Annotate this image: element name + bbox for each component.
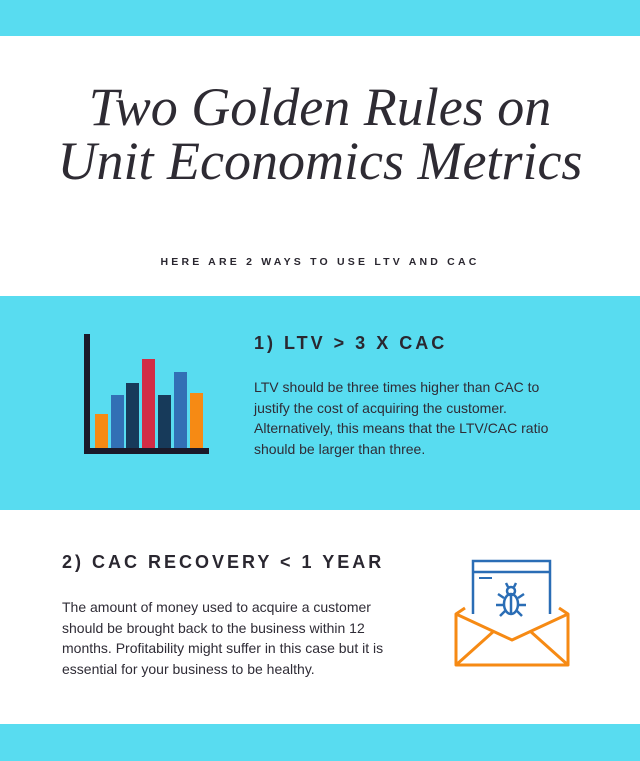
subtitle: HERE ARE 2 WAYS TO USE LTV AND CAC: [160, 256, 480, 268]
icon: bar chart: [84, 334, 209, 454]
text: rule 2: The amount of money used to acquire a customer should be brought back to the business within 12 months. Profitability might suffer in this case but it is essential for your business to be healthy.: [62, 599, 383, 676]
heading: rule 2: 2) CAC RECOVERY < 1 YEAR: [62, 552, 384, 572]
title: Two Golden Rules on: [89, 77, 551, 137]
title: Unit Economics Metrics: [58, 131, 582, 191]
heading: rule 1: 1) LTV > 3 X CAC: [254, 333, 447, 353]
title: [58, 77, 582, 191]
icon: envelope with bug: [454, 560, 570, 666]
text: rule 1: LTV should be three times higher than CAC to justify the cost of acquiring the customer. Alternatively, this means that the LTV/CAC ratio should be larger than three.: [254, 379, 548, 456]
